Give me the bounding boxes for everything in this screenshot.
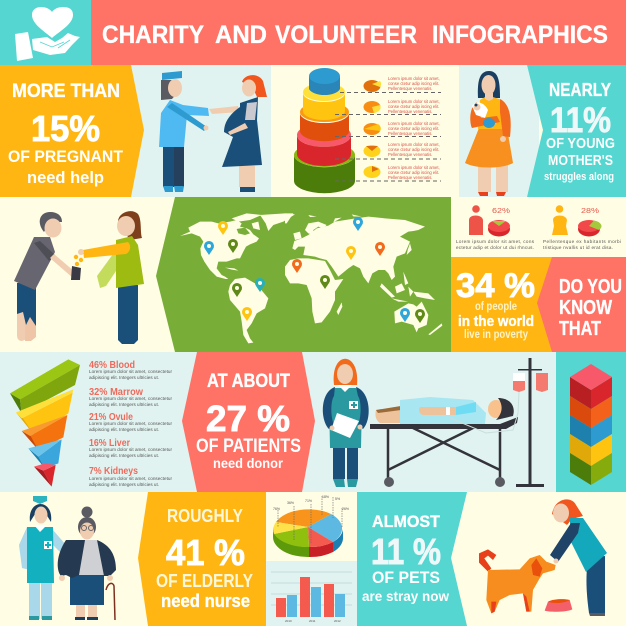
callout: do you know that: THAT — [559, 318, 601, 340]
callout: 27% of patients: need donor — [213, 455, 283, 471]
continents: Eurasia, Africa, Australia — [285, 213, 442, 335]
callout: 11% of pets: OF PETS — [372, 568, 440, 587]
callout: 34% of people live in poverty: in the world — [458, 313, 534, 330]
funnel labels: Lorem ipsum dolor sit amet, consectetur — [89, 476, 172, 481]
legend rows: mini pies and lorem text: Pellentesque venenatis. — [388, 109, 432, 114]
funnel labels: 16% Liver — [89, 438, 130, 449]
callout: 11% of pets: are stray now — [362, 588, 449, 604]
legend rows: mini pies and lorem text: conse ctetur adip iscing elit. — [388, 170, 439, 175]
funnel labels: Lorem ipsum dolor sit amet, consectetur — [89, 421, 172, 426]
chart: layered cylinder stack — [294, 68, 355, 193]
callout: 11% of young mothers: OF YOUNG — [546, 135, 615, 152]
callout: do you know that — [537, 257, 626, 352]
illustration: mother with baby — [465, 71, 513, 196]
header: logo tile — [0, 0, 91, 65]
chart: inverted funnel — [10, 359, 80, 487]
header: title banner: INFOGRAPHICS — [432, 21, 608, 49]
legend rows: mini pies and lorem text: Pellentesque venenatis. — [388, 152, 432, 157]
funnel labels: 32% Marrow — [89, 387, 143, 398]
illustration: woman feeding dog — [479, 499, 607, 616]
funnel labels: Lorem ipsum dolor sit amet, consectetur — [89, 396, 172, 401]
chart: 3D pie — [273, 495, 349, 557]
chart: bar chart: 2010 — [285, 619, 292, 623]
callout: 27% of patients: AT ABOUT — [207, 371, 290, 392]
illustration: nurse with clipboard — [323, 359, 369, 487]
funnel labels: adipiscing elit. Integers ultricies ut. — [89, 402, 159, 407]
callout: 11% of young mothers — [527, 65, 626, 197]
callout: 41% of elderly: ROUGHLY — [167, 506, 243, 526]
funnel labels: adipiscing elit. Integers ultricies ut. — [89, 482, 159, 487]
chart: 3D pie: 18% — [322, 495, 329, 499]
callout: 27% of patients — [182, 352, 315, 492]
callout: 34% of people live in poverty: of people — [475, 299, 517, 313]
funnel labels: adipiscing elit. Integers ultricies ut. — [89, 375, 159, 380]
chart: isometric block tower — [556, 352, 626, 492]
legend rows: mini pies and lorem text: Lorem ipsum dolor sit amet, — [388, 99, 440, 104]
illustration: nurse and pregnant woman — [159, 71, 267, 192]
illustration: beggar receiving coins from donor — [14, 211, 144, 344]
callout: 15% of pregnant: 15% — [31, 108, 100, 149]
legend rows: mini pies and lorem text: conse ctetur adip iscing elit. — [388, 126, 439, 131]
funnel labels — [89, 360, 172, 487]
funnel labels: Lorem ipsum dolor sit amet, consectetur — [89, 369, 172, 374]
stats: male and female percentages: 62% — [492, 208, 510, 215]
dog — [479, 549, 572, 613]
legend rows: mini pies and lorem text: Lorem ipsum dolor sit amet, — [388, 165, 440, 170]
stats: male and female percentages: Pellentesque ex habitants morbi — [543, 239, 621, 244]
stats: male and female percentages: Lorem ipsum dolor sit amet, cons — [456, 239, 535, 244]
funnel labels: 21% Ovule — [89, 412, 133, 423]
callout: 11% of young mothers: NEARLY — [549, 80, 611, 100]
funnel labels: adipiscing elit. Integers ultricies ut. — [89, 427, 159, 432]
stats: male and female percentages: 28% — [581, 208, 599, 215]
legend rows: mini pies and lorem text: Lorem ipsum dolor sit amet, — [388, 142, 440, 147]
header: title banner — [91, 0, 626, 65]
callout: 15% of pregnant: OF PREGNANT — [8, 147, 124, 166]
funnel labels: 46% Blood — [89, 360, 135, 371]
funnel labels: adipiscing elit. Integers ultricies ut. — [89, 453, 159, 458]
callout: 15% of pregnant — [0, 65, 144, 197]
chart: 3D pie: 5% — [335, 497, 340, 501]
location pins — [204, 217, 425, 323]
callout: 11% of pets: ALMOST — [372, 512, 441, 531]
funnel labels: Lorem ipsum dolor sit amet, consectetur — [89, 447, 172, 452]
chart: 3D pie: 26% — [342, 507, 349, 511]
legend rows: mini pies and lorem text: Pellentesque venenatis. — [388, 86, 432, 91]
chart: 3D pie: 36% — [287, 501, 294, 505]
legend rows: mini pies and lorem text: Lorem ipsum dolor sit amet, — [388, 76, 440, 81]
callout: 34% of people live in poverty: 34 % — [456, 267, 535, 305]
callout: 27% of patients: OF PATIENTS — [196, 436, 301, 457]
header: title banner: CHARITY — [102, 21, 204, 49]
stats: male and female percentages: tristique nvallis ut id erat disa. — [543, 245, 613, 250]
legend rows: mini pies and lorem text: conse ctetur adip iscing elit. — [388, 104, 439, 109]
header: title banner: AND — [215, 21, 267, 49]
callout: 11% of young mothers: 11% — [550, 101, 611, 140]
chart: 3D pie: 71% — [305, 499, 312, 503]
callout: 34% of people live in poverty — [451, 257, 561, 352]
callout: 11% of young mothers: struggles along — [544, 171, 614, 183]
callout: 27% of patients: 27 % — [206, 398, 290, 439]
chart: bar chart — [271, 572, 352, 623]
stats: male and female percentages: ectetur adip et dolor ut dui rhncus. — [456, 245, 534, 250]
callout: 11% of pets — [357, 492, 467, 626]
callout: 41% of elderly: need nurse — [161, 591, 250, 611]
legend rows: mini pies and lorem text: Pellentesque venenatis. — [388, 175, 432, 180]
callout: do you know that: KNOW — [559, 297, 612, 319]
legend rows: mini pies and lorem text: Lorem ipsum dolor sit amet, — [388, 121, 440, 126]
chart: bar chart: 2012 — [334, 619, 341, 623]
continents: Americas — [180, 213, 295, 343]
world map panel — [156, 197, 451, 352]
illustration: patient on stretcher with IV stand — [370, 358, 548, 487]
legend rows: mini pies and lorem text: conse ctetur adip iscing elit. — [388, 81, 439, 86]
legend rows: mini pies and lorem text: conse ctetur adip iscing elit. — [388, 147, 439, 152]
chart: bar chart: 2011 — [309, 619, 316, 623]
callout: 41% of elderly — [138, 492, 266, 626]
callout: 41% of elderly: OF ELDERLY — [156, 571, 253, 591]
callout: 15% of pregnant: MORE THAN — [12, 81, 120, 102]
stats: male and female percentages — [456, 205, 621, 250]
callout: 41% of elderly: 41 % — [166, 532, 245, 573]
legend rows: mini pies and lorem text — [335, 76, 441, 181]
callout: 34% of people live in poverty: live in poverty — [464, 327, 528, 341]
illustration: nurse with elderly woman — [19, 496, 116, 620]
header: title banner: VOLUNTEER — [275, 21, 417, 49]
callout: 11% of young mothers: MOTHER'S — [548, 152, 613, 169]
legend rows: mini pies and lorem text: Pellentesque venenatis. — [388, 131, 432, 136]
chart: 3D pie: 76% — [273, 507, 280, 511]
callout: 15% of pregnant: need help — [27, 168, 104, 187]
funnel labels: 7% Kidneys — [89, 466, 138, 477]
callout: 11% of pets: 11 % — [371, 531, 441, 572]
